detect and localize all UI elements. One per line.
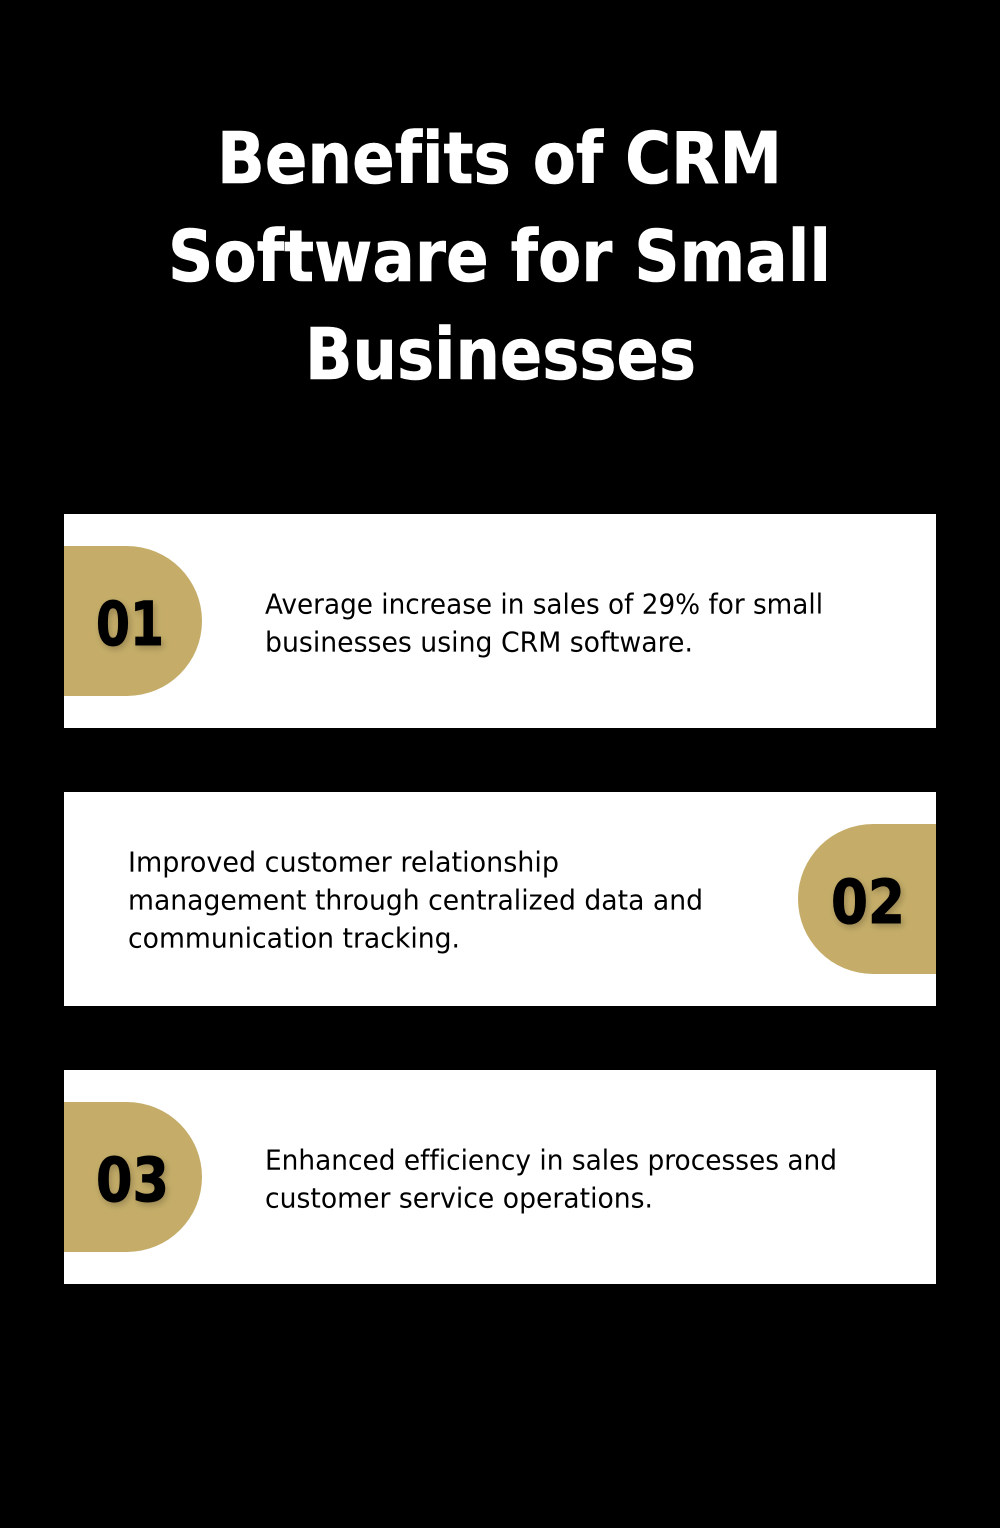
text: benefit 01: Average increase in sales of 29% for small xyxy=(265,588,823,620)
text: benefit 02: management through centralized data and xyxy=(128,884,703,916)
title: Software for Small xyxy=(168,215,831,298)
badge: 02: 02 xyxy=(831,867,905,938)
text: benefit 02: Improved customer relationship xyxy=(128,846,559,878)
title: Benefits of CRM xyxy=(217,117,782,200)
badge: 01 xyxy=(64,546,202,696)
text: benefit 03: customer service operations. xyxy=(265,1182,653,1214)
badge: 02 xyxy=(798,824,936,974)
text: benefit 02 xyxy=(128,846,703,954)
text: benefit 02: communication tracking. xyxy=(128,922,460,954)
panel: benefit 03 xyxy=(64,1070,936,1284)
text: benefit 01 xyxy=(265,588,823,658)
panel: benefit 02 xyxy=(64,792,936,1006)
text: benefit 01: businesses using CRM software. xyxy=(265,626,693,658)
title xyxy=(168,117,831,396)
badge: 03 xyxy=(64,1102,202,1252)
badge: 01: 01 xyxy=(96,589,164,660)
title: Businesses xyxy=(305,313,696,396)
text: benefit 03 xyxy=(265,1144,837,1214)
panel: benefit 01 xyxy=(64,514,936,728)
text: benefit 03: Enhanced efficiency in sales processes and xyxy=(265,1144,837,1176)
badge: 03: 03 xyxy=(96,1145,169,1216)
